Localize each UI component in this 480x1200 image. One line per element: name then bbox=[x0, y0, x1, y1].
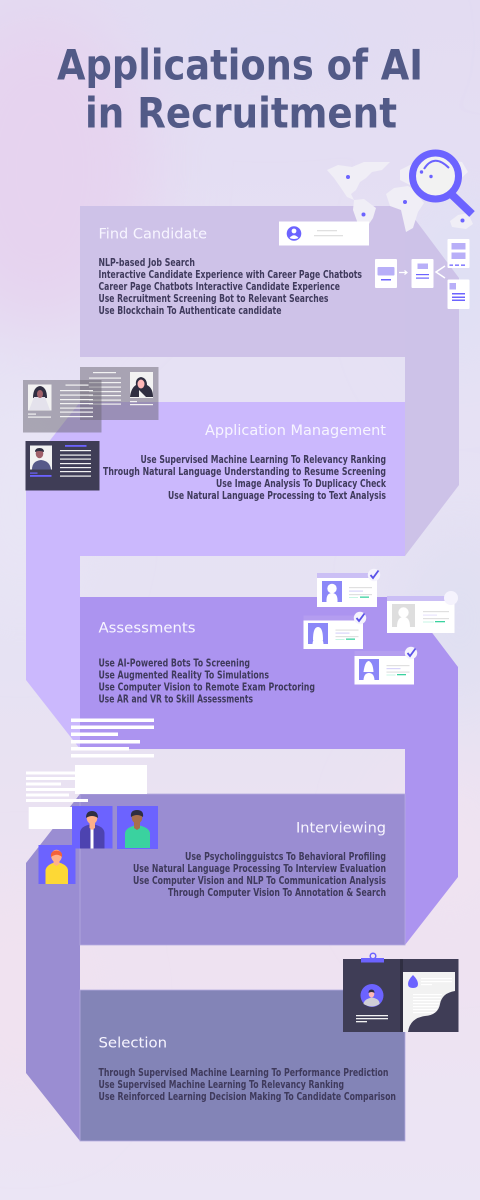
list: assessments: Use Computer Vision to Remote Exam Proctoring bbox=[98, 682, 315, 694]
list: find candidate bbox=[98, 257, 362, 317]
list: application management bbox=[103, 454, 387, 502]
icon: interviewee portrait 1 bbox=[72, 806, 112, 848]
icon: assessment card 2 bbox=[387, 591, 458, 633]
icon: chat lines upper bbox=[71, 718, 154, 758]
heading: interviewing: Interviewing bbox=[296, 821, 386, 837]
title bbox=[57, 40, 423, 138]
list: assessments: Use Augmented Reality To Simulations bbox=[98, 670, 269, 682]
list: find candidate: Interactive Candidate Experience with Career Page Chatbots bbox=[98, 269, 362, 281]
heading: application management: Application Management bbox=[205, 423, 387, 439]
list: assessments: Use AI-Powered Bots To Screening bbox=[98, 658, 250, 670]
panel: assessments bbox=[80, 597, 405, 749]
icon: chat lines lower bbox=[26, 765, 147, 829]
list: assessments: Use AR and VR to Skill Assessments bbox=[98, 694, 253, 706]
list: application management: Use Image Analysis To Duplicacy Check bbox=[216, 478, 387, 490]
title: in Recruitment bbox=[85, 88, 397, 138]
panel: application management bbox=[80, 402, 405, 556]
list: find candidate: Career Page Chatbots Interactive Candidate Experience bbox=[98, 281, 340, 293]
list: application management: Use Natural Language Processing to Text Analysis bbox=[168, 490, 386, 502]
list: find candidate: Use Blockchain To Authenticate candidate bbox=[98, 305, 282, 317]
list: interviewing: Through Computer Vision To Annotation & Search bbox=[168, 887, 386, 899]
icon: assessment card 3 bbox=[304, 612, 366, 649]
icon: resume card grey 2 bbox=[80, 367, 158, 420]
list: application management: Use Supervised Machine Learning To Relevancy Ranking bbox=[140, 454, 386, 466]
side: assessments bbox=[405, 597, 458, 945]
side: find candidate bbox=[405, 206, 459, 556]
side: interviewing bbox=[26, 794, 80, 1141]
title: Applications of AI bbox=[57, 40, 423, 90]
list: selection bbox=[98, 1067, 396, 1103]
list: find candidate: NLP-based Job Search bbox=[98, 257, 195, 269]
list: interviewing: Use Psycholingguistcs To Behavioral Profiling bbox=[185, 851, 386, 863]
icon: interviewee portrait 2 bbox=[117, 806, 158, 849]
icon: interviewee portrait 3 bbox=[38, 845, 76, 884]
icon: search flow diagram bbox=[375, 239, 470, 309]
icon: assessment card 1 bbox=[317, 569, 380, 607]
list: interviewing bbox=[133, 851, 386, 899]
heading: find candidate: Find Candidate bbox=[98, 227, 207, 243]
list: assessments bbox=[98, 658, 315, 706]
list: interviewing: Use Computer Vision and NLP To Communication Analysis bbox=[133, 875, 386, 887]
icon: resume card dark bbox=[26, 441, 100, 490]
icon: resume card grey 1 bbox=[23, 380, 102, 432]
panel: selection bbox=[80, 990, 405, 1141]
heading: selection: Selection bbox=[98, 1035, 167, 1051]
panel: find candidate bbox=[80, 206, 405, 357]
panel: interviewing bbox=[80, 794, 405, 945]
icon: candidate profile card bbox=[279, 222, 369, 246]
side: application management bbox=[26, 402, 80, 749]
icon: assessment card 4 bbox=[354, 647, 417, 684]
icon: world map with magnifier bbox=[327, 153, 473, 240]
list: interviewing: Use Natural Language Processing To Interview Evaluation bbox=[133, 863, 386, 875]
list: find candidate: Use Recruitment Screening Bot to Relevant Searches bbox=[98, 293, 328, 305]
list: application management: Through Natural Language Understanding to Resume Screening bbox=[103, 466, 386, 478]
list: selection: Use Supervised Machine Learning To Relevancy Ranking bbox=[98, 1079, 344, 1091]
list: selection: Through Supervised Machine Learning To Performance Prediction bbox=[98, 1067, 388, 1079]
heading: assessments: Assessments bbox=[98, 621, 196, 637]
icon: id folder bbox=[343, 953, 458, 1032]
